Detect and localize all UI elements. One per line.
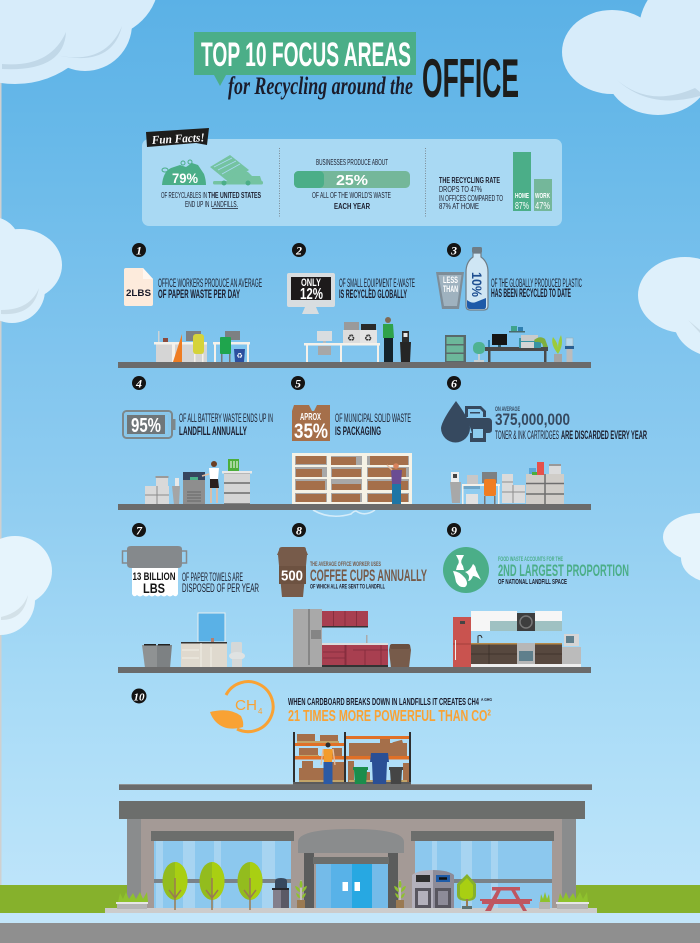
panel: item 10 cardboard methane	[132, 682, 492, 786]
badge 3: 3	[450, 244, 457, 258]
bar chart	[513, 152, 552, 212]
fact: businesses produce 25 percent: OF ALL OF THE WORLD'S WASTE	[312, 191, 391, 200]
illustration: filing cabinet and desk	[445, 326, 574, 362]
path	[0, 913, 700, 923]
trash bin	[272, 878, 289, 908]
illustration: modern kitchen	[453, 611, 581, 668]
icon: battery: 95%	[131, 415, 161, 437]
badge 10	[132, 688, 146, 704]
badge 8: 8	[296, 524, 302, 538]
badge 1: 1	[136, 244, 142, 258]
badge 4: 4	[135, 376, 142, 390]
sidewalk	[105, 908, 597, 913]
bar chart: WORK	[535, 191, 550, 200]
shelf 2	[118, 504, 591, 510]
title line 1: TOP 10 FOCUS AREAS	[201, 36, 411, 74]
panel: item 10 cardboard methane: 21 TIMES MORE POWERFUL THAN CO²	[288, 708, 491, 725]
icon: ink drop and printer	[441, 401, 492, 442]
infographic canvas: OFFICE WORKERS PRODUCE AN AVERAGE	[158, 278, 262, 290]
illustration: desk with recycling and person: ♻	[347, 334, 355, 344]
badge 7	[132, 523, 146, 538]
grass	[0, 885, 700, 913]
panel: item 9 food waste: OF NATIONAL LANDFILL SPACE	[498, 579, 567, 586]
icon: bottle	[466, 247, 488, 310]
left window	[151, 831, 294, 908]
infographic canvas: OFFICE	[422, 47, 519, 109]
icon: paper towel roll: LBS	[143, 580, 165, 596]
panel: item 1 paper waste	[124, 243, 262, 362]
panel: item 8 coffee cups: COFFEE CUPS ANNUALLY	[310, 567, 427, 585]
illustration: desk with recycling and person: ♻	[364, 334, 372, 344]
bar chart: 47%	[535, 201, 550, 212]
progress bar	[294, 171, 410, 188]
icon: paper towel roll: 13 BILLION	[132, 571, 176, 583]
cloud: top left	[0, 0, 159, 84]
icon: monitor	[287, 273, 335, 314]
panel: item 4 battery	[123, 376, 273, 505]
exterior items	[116, 862, 589, 911]
fact: recycling rate home vs work: IN OFFICES COMPARED TO	[439, 194, 503, 203]
fact: recycling rate home vs work: DROPS TO 47%	[439, 185, 482, 194]
cloud: outline below shelf	[313, 510, 375, 516]
building roof	[119, 801, 585, 819]
panel: item 10 cardboard methane: WHEN CARDBOARD BREAKS DOWN IN LANDFILLS IT CREATES CH4	[288, 696, 479, 708]
trees	[162, 862, 262, 910]
illustration: desk with recycling and person	[304, 317, 411, 362]
potted plants	[295, 880, 406, 908]
illustration: office desks: ♻	[236, 352, 243, 360]
icon: monitor: 12%	[300, 286, 323, 303]
planter right	[556, 892, 589, 909]
panel: fun facts	[142, 128, 562, 226]
icon: methane leaf	[210, 682, 273, 732]
fact: recycling rate home vs work: 87% AT HOME	[439, 202, 479, 211]
bar chart: 87%	[515, 201, 529, 212]
badge 6: 6	[451, 376, 457, 390]
cloud: left lower	[0, 536, 52, 635]
badge 2: 2	[295, 244, 302, 258]
fact: businesses produce 25 percent: EACH YEAR	[334, 202, 370, 211]
illustration: copier and cabinet	[145, 459, 252, 505]
panel: item 2 e-waste: IS RECYCLED GLOBALLY	[339, 289, 407, 301]
badge 5: 5	[295, 376, 301, 390]
recycling station	[412, 870, 454, 908]
title banner	[194, 32, 416, 86]
left page edge	[0, 0, 2, 920]
building	[119, 801, 585, 908]
bar chart: HOME	[515, 191, 529, 200]
small pot plant	[539, 892, 550, 909]
illustration: warehouse shelves	[292, 453, 412, 504]
fun facts tag: Fun Facts!	[150, 130, 205, 147]
icon: coffee cup: 500	[281, 568, 303, 584]
icon: bottle: 10%	[469, 272, 485, 297]
panel: item 3 plastic	[436, 243, 582, 362]
badge 7: 7	[136, 524, 143, 538]
panel: item 10 cardboard methane: A GHG	[481, 697, 492, 702]
badge 3	[447, 243, 461, 258]
fact: businesses produce 25 percent: 25%	[336, 172, 368, 189]
fact: recycling rate home vs work: THE RECYCLING RATE	[439, 176, 500, 185]
fact: businesses produce 25 percent: BUSINESSES PRODUCE ABOUT	[316, 158, 388, 167]
icon: methane leaf: CH	[235, 697, 257, 714]
shelf 4	[119, 784, 592, 790]
small tree	[457, 874, 476, 909]
illustration: warehouse rack with bins	[293, 732, 411, 786]
panel: item 3 plastic: HAS BEEN RECYCLED TO DATE	[491, 288, 571, 300]
fact: recycling rate home vs work	[439, 152, 552, 212]
panel: item 8 coffee cups: OF WHICH ALL ARE SENT TO LANDFILL	[310, 584, 385, 590]
cloud: right middle	[638, 257, 700, 358]
badge 9: 9	[451, 524, 457, 538]
icon: dump truck	[210, 155, 263, 186]
fact: 79 percent in landfills: 79%	[172, 170, 199, 186]
badge 10: 10	[134, 692, 145, 704]
infographic canvas: OF SMALL EQUIPMENT E-WASTE	[339, 278, 415, 290]
illustration: office storage	[450, 462, 564, 504]
fact: 79 percent in landfills: THE UNITED STATES	[208, 191, 261, 200]
icon: methane leaf: 4	[258, 707, 263, 716]
fact: businesses produce 25 percent	[294, 158, 410, 211]
icon: food waste	[443, 547, 489, 593]
panel: item 2 e-waste	[287, 243, 415, 362]
icon: monitor: ONLY	[301, 277, 321, 289]
entrance door	[304, 852, 398, 908]
title	[194, 32, 519, 109]
picnic table	[480, 887, 532, 911]
panel: item 5 packaging	[291, 376, 412, 504]
icon: landfill heap	[162, 160, 206, 185]
divider	[280, 148, 426, 218]
shelf 1	[118, 362, 591, 368]
illustration: restroom	[142, 613, 245, 668]
panel background	[142, 139, 562, 226]
panel: item 9 food waste: FOOD WASTE ACCOUNTS FOR THE	[498, 556, 563, 563]
infographic canvas: OF MUNICIPAL SOLID WASTE	[335, 413, 411, 425]
icon: cup: LESS	[443, 275, 458, 285]
badge 8	[292, 523, 306, 538]
shelf 3	[118, 667, 591, 673]
fact: 79 percent in landfills	[161, 155, 263, 209]
badge 9	[447, 523, 461, 538]
icon: cardboard box	[292, 405, 330, 443]
icon: cup	[436, 272, 464, 309]
icon: cup: THAN	[443, 284, 458, 294]
panel: item 9 food waste	[443, 523, 629, 668]
entrance canopy	[298, 829, 404, 853]
panel: item 7 paper towels	[122, 523, 259, 668]
panel: item 1 paper waste: OF PAPER WASTE PER DAY	[158, 289, 240, 301]
panel: item 8 coffee cups: THE AVERAGE OFFICE WORKER USES	[310, 562, 381, 568]
panel: item 6 toner	[441, 376, 647, 504]
fact: 79 percent in landfills: END UP IN LANDFILLS.	[185, 200, 238, 209]
badge 4	[132, 376, 146, 390]
clouds	[0, 0, 700, 635]
panel: item 8 coffee cups	[277, 523, 427, 668]
icon: battery	[123, 411, 176, 438]
building columns	[127, 819, 576, 908]
panel: item 6 toner: ON AVERAGE	[495, 406, 520, 413]
cloud: left middle	[0, 217, 62, 323]
icon: paper sheet: 2LBS	[126, 288, 151, 299]
panel: item 4 battery: LANDFILL ANNUALLY	[179, 426, 247, 438]
planter left	[116, 892, 148, 909]
building wall	[141, 819, 562, 908]
cloud: top right	[562, 0, 700, 115]
panel: item 6 toner: TONER & INK CARTRIDGES	[495, 430, 559, 442]
road	[0, 923, 700, 943]
icon: cardboard box: 35%	[294, 420, 328, 443]
panel: item 5 packaging: IS PACKAGING	[335, 426, 381, 438]
illustration: red kitchen	[293, 609, 411, 668]
panel: item 7 paper towels: DISPOSED OF PER YEAR	[182, 583, 259, 595]
cloud: right lower	[663, 513, 700, 583]
right window	[411, 831, 554, 908]
icon: coffee cup	[277, 547, 308, 597]
infographic canvas: OF ALL BATTERY WASTE ENDS UP IN	[179, 413, 273, 425]
panel: item 6 toner: 375,000,000	[495, 410, 570, 429]
icon: cardboard box: APROX	[300, 412, 321, 423]
badge 6	[447, 376, 461, 390]
title line 2 script: for Recycling around the	[228, 73, 413, 100]
icon: paper towel roll	[122, 546, 186, 596]
fact: 79 percent in landfills: OF RECYCLABLES IN	[161, 191, 207, 200]
panel: item 7 paper towels: OF PAPER TOWELS ARE	[182, 572, 243, 584]
